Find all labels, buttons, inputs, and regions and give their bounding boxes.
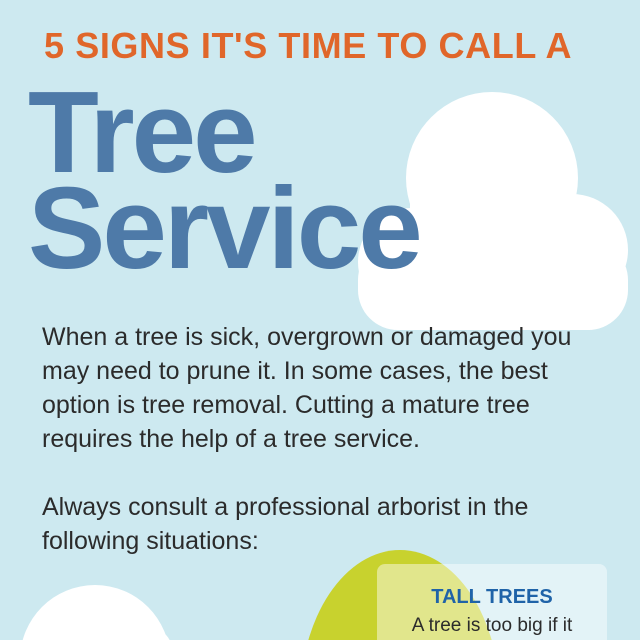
intro text: When a tree is sick, overgrown or damaged you may need to prune it. In some cases, the best option is tree removal. Cutting a mature tree requires the help of a tree service.	[42, 323, 571, 453]
title: Service	[28, 163, 420, 293]
intro text	[42, 323, 571, 555]
card heading: TALL TREES	[431, 586, 553, 608]
green tree canopy	[300, 550, 500, 640]
card: tall trees	[377, 564, 607, 640]
card text: A tree is too big if it	[412, 615, 572, 636]
title: Tree	[28, 67, 255, 197]
cloud: bottom left	[20, 585, 172, 640]
subtitle: 5 SIGNS IT'S TIME TO CALL A	[44, 25, 572, 66]
intro text: Always consult a professional arborist in the following situations:	[42, 493, 528, 555]
title	[28, 67, 420, 293]
